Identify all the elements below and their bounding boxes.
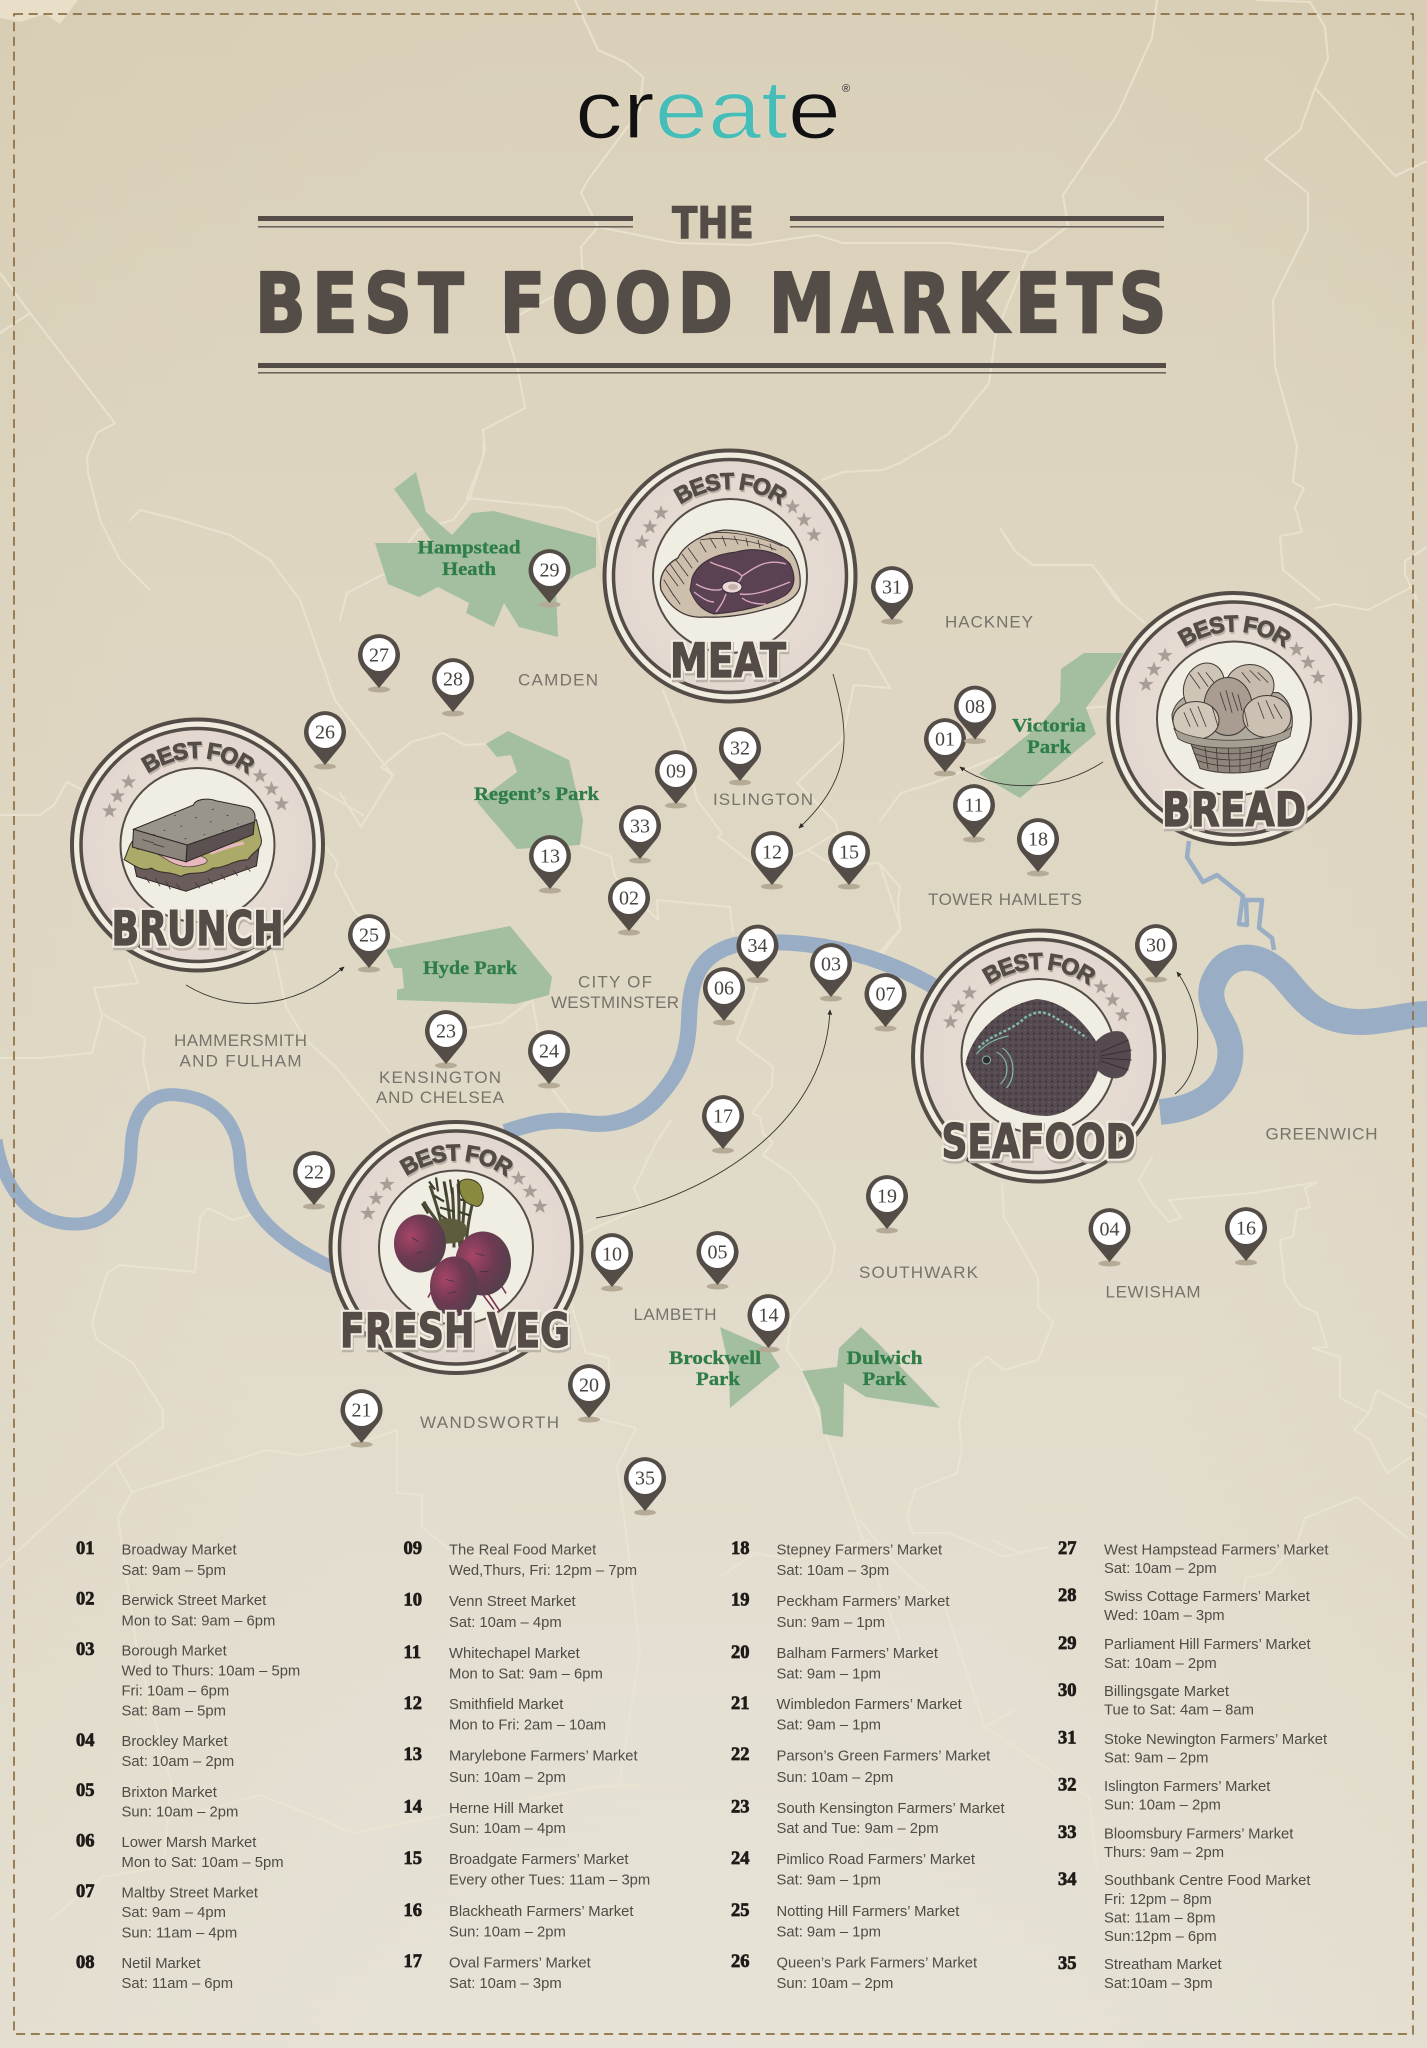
market list: column 3: Sat: 10am – 3pm [776, 1563, 889, 1579]
market list: column 4: 33 [1058, 1823, 1076, 1843]
pin 04: 04 [1100, 1218, 1120, 1240]
market list: column 4: Fri: 12pm – 8pm [1104, 1892, 1212, 1908]
market list: column 1: Netil Market [122, 1956, 200, 1972]
market list: column 2: 10 [404, 1590, 422, 1610]
market list: column 1: Maltby Street Market [122, 1886, 258, 1902]
market list: column 1: Sun: 11am – 4pm [122, 1926, 237, 1942]
arrows from badges to markets [186, 674, 1198, 1218]
borough labels: ISLINGTON [713, 790, 813, 809]
badge: best for seafood: BEST FOR [982, 952, 1096, 988]
park labels: Park [1027, 737, 1071, 758]
title [255, 198, 1173, 374]
pin 08 [954, 686, 996, 744]
pin 09: 09 [666, 760, 686, 782]
market list: column 3: Stepney Farmers’ Market [776, 1542, 942, 1558]
borough labels [174, 612, 1378, 1432]
market list: column 3: Sun: 10am – 2pm [776, 1770, 893, 1786]
pin 07: 07 [876, 984, 896, 1006]
market list: column 4: Islington Farmers’ Market [1104, 1779, 1270, 1795]
market list: column 4: 28 [1058, 1586, 1076, 1606]
pin 09 [655, 750, 697, 808]
map: River Thames [0, 841, 1427, 1268]
market list: column 4: Sat: 11am – 8pm [1104, 1910, 1216, 1926]
market list: column 3: Sun: 9am – 1pm [776, 1615, 885, 1631]
market list: column 2: Marylebone Farmers’ Market [449, 1748, 638, 1764]
market list: column 4: Swiss Cottage Farmers’ Market [1104, 1589, 1310, 1605]
pin 23: 23 [436, 1020, 456, 1042]
pin 14 [748, 1294, 790, 1352]
pin 19: 19 [877, 1186, 897, 1208]
market list: column 3: 23 [731, 1798, 750, 1818]
pin 14: 14 [758, 1304, 778, 1326]
market list: column 4: 31 [1058, 1728, 1076, 1748]
market list: column 2: 16 [404, 1901, 422, 1921]
market list: column 4: Wed: 10am – 3pm [1104, 1608, 1225, 1624]
market list: column 1: Brockley Market [122, 1734, 228, 1750]
pin 20: 20 [579, 1374, 599, 1396]
market list: column 3: South Kensington Farmers’ Market [776, 1801, 1005, 1817]
market list: column 2: Whitechapel Market [449, 1646, 580, 1662]
market list: column 1: Mon to Sat: 9am – 6pm [122, 1614, 275, 1630]
market list: column 2: Mon to Fri: 2am – 10am [449, 1718, 606, 1734]
badge: best for meat: MEAT [670, 634, 786, 689]
market list: column 4: 29 [1058, 1634, 1076, 1654]
pin 34 [736, 925, 778, 983]
pin 31 [871, 566, 913, 624]
pin 24 [528, 1030, 570, 1088]
market list: column 2: Sun: 10am – 2pm [449, 1924, 566, 1940]
pin 26: 26 [315, 722, 335, 744]
map: parks [375, 472, 1124, 1437]
borough labels: TOWER HAMLETS [928, 890, 1082, 909]
market list: column 2: Sun: 10am – 4pm [449, 1821, 566, 1837]
borough labels: AND FULHAM [180, 1052, 302, 1070]
market list: column 4: 35 [1058, 1954, 1076, 1974]
market list: column 3: 26 [731, 1952, 750, 1972]
pin 07 [864, 973, 906, 1032]
pin 15 [828, 831, 870, 890]
market list: column 4 [1058, 1539, 1328, 1992]
park: Dulwich Park [802, 1327, 940, 1437]
pin 22 [293, 1151, 335, 1210]
pin 26 [304, 711, 346, 770]
market list: column 3: Sat: 9am – 1pm [776, 1718, 881, 1734]
market list: column 4: Sat:10am – 3pm [1104, 1976, 1213, 1992]
market list: column 2 [404, 1539, 650, 1992]
pin 35: 35 [635, 1468, 655, 1490]
market list: column 2: Sat: 10am – 4pm [449, 1615, 562, 1631]
map pins [293, 549, 1267, 1516]
pin 02 [608, 877, 650, 936]
pin 23 [425, 1010, 467, 1068]
icon: bread basket [1172, 657, 1292, 773]
pin 15: 15 [839, 842, 859, 864]
borough labels: HACKNEY [945, 612, 1033, 632]
market list: column 2: Every other Tues: 11am – 3pm [449, 1872, 650, 1888]
market list: column 2: 17 [404, 1952, 422, 1972]
park: Brockwell Park [720, 1327, 780, 1408]
market list: column 2: 12 [404, 1694, 422, 1714]
pin 34: 34 [748, 935, 768, 957]
pin 05: 05 [708, 1242, 728, 1264]
pin 27 [358, 634, 400, 692]
market list: column 1: 08 [76, 1953, 94, 1973]
park labels: Park [862, 1369, 907, 1390]
market list: column 3: Sat: 9am – 1pm [776, 1872, 881, 1888]
badge: best for seafood: SEAFOOD [942, 1115, 1136, 1170]
market list: column 1: Brixton Market [122, 1785, 217, 1801]
park: Hyde Park [386, 926, 552, 1004]
pin 28: 28 [443, 668, 463, 690]
market list: column 3: 18 [731, 1539, 750, 1559]
market list: column 4: Billingsgate Market [1104, 1684, 1229, 1700]
market list: column 1: Borough Market [122, 1644, 227, 1660]
pin 06 [703, 967, 745, 1026]
market list: column 1: Mon to Sat: 10am – 5pm [122, 1855, 284, 1871]
pin 28 [432, 658, 474, 716]
pin 19 [866, 1175, 908, 1234]
borough labels: LEWISHAM [1106, 1282, 1200, 1302]
badge: best for meat: BEST FOR [673, 472, 788, 508]
pin 21: 21 [352, 1400, 372, 1422]
logo: create: ® [842, 83, 850, 95]
badge: best for fresh veg: BEST FOR [399, 1144, 514, 1179]
borough labels: GREENWICH [1266, 1124, 1378, 1144]
market list: column 3: Peckham Farmers’ Market [776, 1594, 949, 1610]
market list: column 1: Lower Marsh Market [122, 1835, 256, 1851]
park labels: Brockwell [669, 1348, 761, 1369]
market list: column 3: Pimlico Road Farmers’ Market [776, 1852, 975, 1868]
market list: column 1: 06 [76, 1832, 94, 1852]
market list: column 2: Broadgate Farmers’ Market [449, 1852, 629, 1868]
market list: column 3: Parson’s Green Farmers’ Market [776, 1748, 990, 1764]
pin 17: 17 [713, 1106, 733, 1128]
market list: column 1: 03 [76, 1640, 94, 1660]
pin 35 [624, 1457, 666, 1516]
borough labels: WESTMINSTER [551, 993, 679, 1012]
pin 22: 22 [304, 1162, 324, 1184]
borough labels: HAMMERSMITH [174, 1031, 307, 1050]
market list: column 1: 04 [76, 1731, 94, 1751]
market list: column 4: Sat: 9am – 2pm [1104, 1750, 1208, 1766]
market list: column 1: Sun: 10am – 2pm [122, 1804, 238, 1820]
market list: column 4: Bloomsbury Farmers’ Market [1104, 1826, 1293, 1842]
market list: column 3: 24 [731, 1849, 750, 1869]
market list: column 1: Sat: 9am – 5pm [122, 1563, 226, 1579]
park labels: Hampstead [418, 538, 521, 558]
park labels: Regent’s Park [474, 784, 599, 805]
park labels: Heath [442, 559, 496, 580]
borough labels: KENSINGTON [379, 1068, 501, 1087]
market list: column 4: West Hampstead Farmers’ Market [1104, 1542, 1328, 1558]
market list: column 4: Sat: 10am – 2pm [1104, 1561, 1217, 1577]
market list: column 3: Queen’s Park Farmers’ Market [776, 1956, 977, 1972]
market list: column 3: Sun: 10am – 2pm [776, 1976, 893, 1992]
pin 29 [528, 549, 570, 608]
logo: create: create [575, 63, 841, 156]
market list: column 2: 11 [404, 1643, 421, 1663]
pin 33: 33 [630, 816, 650, 838]
market list: column 3: Sat and Tue: 9am – 2pm [776, 1821, 939, 1837]
pin 31: 31 [882, 576, 902, 598]
market list: column 1: Fri: 10am – 6pm [122, 1684, 229, 1700]
badge: best for seafood [911, 928, 1166, 1184]
market list: column 3: 19 [731, 1590, 750, 1610]
park: Regent's Park [477, 731, 583, 849]
park labels [418, 538, 1087, 1390]
pin 17 [702, 1095, 744, 1154]
pin 03 [810, 943, 852, 1002]
market list: column 1: Sat: 9am – 4pm [122, 1905, 226, 1921]
market list: column 3: Notting Hill Farmers’ Market [776, 1904, 959, 1920]
pin 08: 08 [965, 696, 985, 718]
market list: column 4: Streatham Market [1104, 1957, 1222, 1973]
pin 04 [1088, 1208, 1130, 1266]
pin 25 [348, 914, 390, 972]
market list: column 4: Southbank Centre Food Market [1104, 1873, 1310, 1889]
market list: column 2: Smithfield Market [449, 1697, 563, 1713]
pin 01 [924, 718, 966, 776]
pin 06: 06 [714, 978, 734, 1000]
pin 10: 10 [602, 1244, 622, 1266]
market list: column 4: 32 [1058, 1776, 1076, 1796]
park: Victoria Park [979, 653, 1124, 798]
market list: column 3: Balham Farmers’ Market [776, 1646, 938, 1662]
market list: column 4: Stoke Newington Farmers’ Market [1104, 1732, 1327, 1748]
pin 25: 25 [359, 924, 379, 946]
pin 20 [568, 1364, 610, 1422]
market list: column 2: Sat: 10am – 3pm [449, 1976, 562, 1992]
park labels: Dulwich [846, 1348, 923, 1369]
market list: column 3: Wimbledon Farmers’ Market [776, 1697, 962, 1713]
market list: column 1: 05 [76, 1781, 94, 1801]
borough labels: LAMBETH [634, 1305, 716, 1324]
pin 10 [591, 1233, 633, 1292]
market list: column 1: Broadway Market [122, 1542, 237, 1558]
park labels: Hyde Park [423, 958, 517, 979]
borough labels: SOUTHWARK [859, 1263, 979, 1282]
heading: THE: THE [672, 198, 754, 249]
market list: column 1: Berwick Street Market [122, 1593, 266, 1609]
pin 16: 16 [1236, 1218, 1256, 1240]
pin 18 [1017, 818, 1059, 876]
borough labels: AND CHELSEA [376, 1088, 505, 1107]
pin 29: 29 [540, 560, 560, 582]
icon: cut of meat [660, 530, 800, 617]
market list: column 4: Sat: 10am – 2pm [1104, 1656, 1217, 1672]
pin 32 [719, 727, 761, 786]
icon: beetroots [394, 1178, 511, 1316]
market list: column 4: Sun: 10am – 2pm [1104, 1798, 1221, 1814]
market list: column 1 [76, 1539, 300, 1992]
market list: column 4: 27 [1058, 1539, 1076, 1559]
pin 16 [1225, 1207, 1267, 1266]
market list: column 2: 09 [404, 1539, 422, 1559]
pin 11 [953, 784, 995, 842]
market list: column 3: 22 [731, 1745, 750, 1765]
market list: column 1: 07 [76, 1882, 94, 1902]
market list: column 3 [731, 1539, 1005, 1992]
market list: column 1: 02 [76, 1590, 94, 1610]
market list: column 2: 14 [404, 1798, 422, 1818]
badge: best for fresh veg [328, 1120, 584, 1375]
market list: column 4: Thurs: 9am – 2pm [1104, 1845, 1224, 1861]
market list: column 2: The Real Food Market [449, 1542, 596, 1558]
heading: BEST FOOD MARKETS: BEST FOOD MARKETS [255, 257, 1173, 352]
pin 30 [1135, 924, 1177, 982]
park: Hampstead Heath [375, 472, 596, 637]
market list: column 1: Sat: 11am – 6pm [122, 1976, 233, 1992]
market list: column 2: Sun: 10am – 2pm [449, 1770, 566, 1786]
borough labels: CITY OF [578, 972, 652, 992]
market list: column 3: 20 [731, 1643, 750, 1663]
badge: best for brunch [70, 718, 325, 972]
badge: best for brunch: BEST FOR [140, 742, 256, 776]
pin 02: 02 [619, 888, 639, 910]
market list: column 3: Sat: 9am – 1pm [776, 1924, 881, 1940]
market list: column 3: Sat: 9am – 1pm [776, 1666, 881, 1682]
pin 24: 24 [539, 1040, 559, 1062]
market list: column 2: Wed,Thurs, Fri: 12pm – 7pm [449, 1563, 637, 1579]
market list: column 2: 13 [404, 1745, 422, 1765]
market list: column 4: Sun:12pm – 6pm [1104, 1929, 1217, 1945]
market list: column 2: Oval Farmers’ Market [449, 1956, 591, 1972]
icon: sandwich [124, 799, 261, 891]
park labels: Victoria [1012, 716, 1087, 736]
market list: column 1: Sat: 10am – 2pm [122, 1754, 234, 1770]
market list: column 3: 25 [731, 1901, 750, 1921]
badge: best for bread: BEST FOR [1177, 615, 1292, 650]
badge: best for meat [602, 448, 858, 704]
pin 18: 18 [1028, 828, 1048, 850]
pin 27: 27 [369, 644, 389, 666]
market list: column 4: 34 [1058, 1870, 1076, 1890]
market list: column 2: Venn Street Market [449, 1594, 576, 1610]
pin 11: 11 [964, 794, 984, 816]
badge: best for brunch: BRUNCH [112, 902, 284, 957]
market list: column 2: Mon to Sat: 9am – 6pm [449, 1666, 603, 1682]
badge: best for bread: BREAD [1162, 783, 1306, 838]
park labels: Park [696, 1369, 740, 1390]
market list: column 1: Wed to Thurs: 10am – 5pm [122, 1664, 300, 1680]
borough labels: CAMDEN [518, 670, 598, 690]
market list: column 4: 30 [1058, 1681, 1076, 1701]
market list: column 1: Sat: 8am – 5pm [122, 1704, 226, 1720]
pin 21 [340, 1389, 382, 1448]
pin 30: 30 [1146, 934, 1166, 956]
icon: flatfish [966, 999, 1132, 1116]
pin 32: 32 [730, 738, 750, 760]
borough labels: WANDSWORTH [420, 1413, 559, 1432]
market list: column 1: 01 [76, 1539, 94, 1559]
badge: best for fresh veg: FRESH VEG [340, 1304, 570, 1359]
pin 13: 13 [540, 846, 560, 868]
market list: column 3: 21 [731, 1694, 750, 1714]
market list: column 4: Parliament Hill Farmers’ Market [1104, 1637, 1311, 1653]
market list: column 2: Blackheath Farmers’ Market [449, 1904, 633, 1920]
market list: column 2: 15 [404, 1849, 422, 1869]
pin 05 [696, 1231, 738, 1290]
pin 12: 12 [762, 842, 782, 864]
pin 03: 03 [821, 954, 841, 976]
pin 01: 01 [935, 728, 955, 750]
pin 12 [751, 831, 793, 890]
market list: column 4: Tue to Sat: 4am – 8am [1104, 1702, 1254, 1718]
pin 13 [529, 835, 571, 894]
pin 33 [619, 805, 661, 864]
badge: best for bread [1106, 591, 1362, 846]
market list: column 2: Herne Hill Market [449, 1801, 563, 1817]
